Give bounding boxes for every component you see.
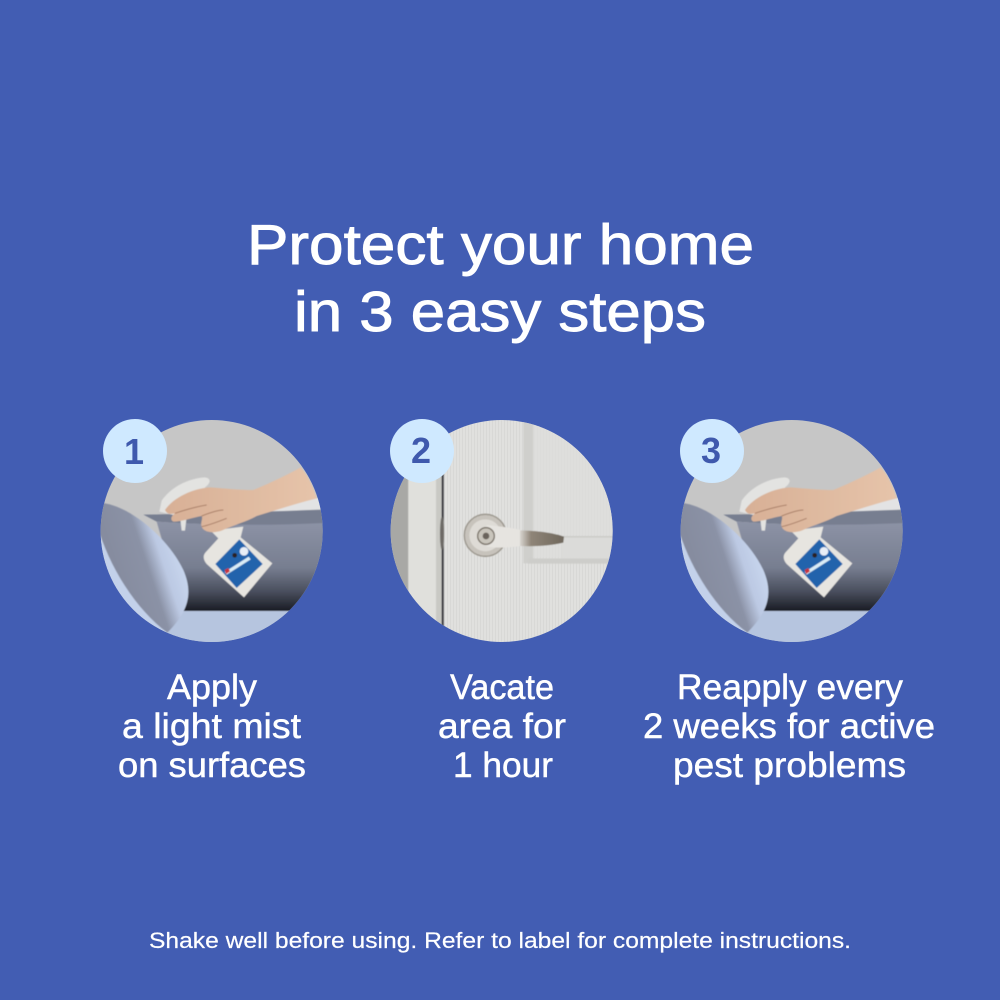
number badge 3	[680, 419, 744, 483]
title: in 3 easy steps	[294, 280, 706, 344]
footer note: Shake well before using. Refer to label for complete instructions.	[149, 928, 851, 953]
step 2 text: Vacate	[450, 668, 554, 707]
step 3 text: pest problems	[673, 746, 906, 785]
title: Protect your home	[247, 213, 754, 277]
step 2 text	[438, 668, 566, 785]
step 3 panel	[643, 410, 935, 785]
number badge 1: 1	[124, 431, 144, 472]
title	[247, 213, 754, 344]
photo: door with lever handle	[390, 420, 613, 642]
step 2 text: 1 hour	[453, 746, 553, 785]
step 1 panel	[90, 410, 330, 785]
photo: hand spraying bottle over sofa	[670, 410, 910, 650]
step 3 text: Reapply every	[677, 668, 903, 707]
step 2 text: area for	[438, 707, 566, 746]
step 1 text	[118, 668, 306, 785]
step 3 text: 2 weeks for active	[643, 707, 935, 746]
number badge 1	[103, 419, 167, 483]
step 2 panel	[390, 419, 613, 778]
number badge 2: 2	[411, 430, 431, 471]
photo: hand spraying bottle over sofa	[90, 410, 330, 650]
step 1 text: a light mist	[122, 707, 301, 746]
step 3 text	[643, 668, 935, 785]
number badge 3: 3	[701, 430, 721, 471]
step 1 text: on surfaces	[118, 746, 306, 785]
number badge 2	[390, 419, 454, 483]
step 1 text: Apply	[167, 668, 258, 707]
